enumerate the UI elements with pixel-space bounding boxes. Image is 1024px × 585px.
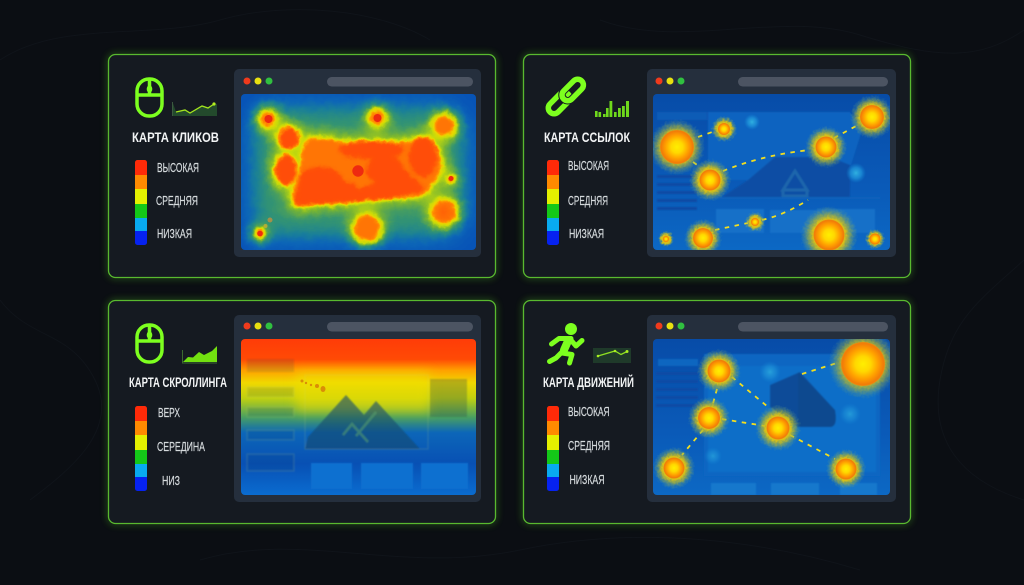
legend: scroll map (135, 406, 205, 491)
panel: click map (108, 54, 496, 278)
legend: movement map (547, 405, 610, 491)
legend label: high: ВЫСОКАЯ (568, 159, 609, 173)
icon: mouse (137, 78, 162, 116)
legend: link map (547, 159, 609, 245)
legend label: low: НИЗКАЯ (569, 227, 604, 241)
browser window: link map (647, 69, 896, 264)
icon: chain link (546, 77, 586, 116)
hotspot halos (653, 95, 890, 250)
icon: runner (550, 323, 582, 363)
chart: link bars (595, 101, 629, 117)
browser window: scroll map (234, 315, 481, 502)
legend label: high: ВЫСОКАЯ (157, 161, 199, 175)
legend color bar (547, 160, 559, 245)
panel frame: scroll map (108, 300, 496, 524)
browser window: click map (234, 69, 481, 257)
legend label: low: НИЗКАЯ (157, 227, 192, 241)
legend label: middle: СЕРЕДИНА (157, 440, 205, 454)
heatmap: movements (653, 329, 898, 495)
blue glows (704, 361, 861, 465)
legend color bar (135, 160, 147, 245)
panel frame: click map (108, 54, 496, 278)
hotspot halos (653, 329, 898, 489)
legend color bar (135, 406, 147, 491)
scroll drop markers (300, 380, 326, 392)
legend label: high: ВЫСОКАЯ (568, 405, 610, 419)
legend: click map (135, 160, 199, 245)
connection lines (682, 362, 840, 459)
browser window: movement map (647, 315, 898, 502)
legend label: bottom: НИЗ (162, 474, 180, 488)
hotspot cores (257, 114, 454, 236)
page wireframe (657, 112, 880, 233)
page wireframe (656, 354, 880, 495)
panel frame: movement map (524, 300, 910, 524)
page wireframe (247, 359, 468, 489)
legend label: medium: СРЕДНЯЯ (568, 194, 608, 208)
legend label: top: ВЕРХ (158, 406, 180, 420)
title: movement map: КАРТА ДВИЖЕНИЙ (543, 375, 634, 390)
legend label: medium: СРЕДНЯЯ (568, 439, 610, 453)
chart: scroll area (182, 346, 217, 363)
chart: click sparkline (172, 102, 217, 116)
heatmap: clicks (236, 89, 481, 255)
hotspot cores (664, 342, 885, 480)
panel: movement map (524, 300, 910, 524)
panel: scroll map (108, 300, 496, 524)
legend label: low: НИЗКАЯ (570, 473, 604, 487)
blue glows (744, 114, 866, 183)
panel frame: link map (524, 54, 910, 278)
heatmap: links (653, 94, 890, 250)
legend label: medium: СРЕДНЯЯ (156, 194, 198, 208)
heatmap: scrolling (241, 339, 476, 495)
hero glow (296, 372, 430, 412)
drop markers (264, 218, 272, 228)
title: link map: КАРТА ССЫЛОК (544, 130, 631, 145)
title: scroll map: КАРТА СКРОЛЛИНГА (129, 375, 227, 390)
legend color bar (547, 406, 559, 491)
hotspot cores (660, 105, 884, 250)
connection lines (693, 125, 858, 230)
icon: mouse (137, 324, 162, 362)
panel: link map (524, 54, 910, 278)
chart: movement sparkline (593, 348, 631, 363)
title: click map: КАРТА КЛИКОВ (132, 130, 219, 145)
